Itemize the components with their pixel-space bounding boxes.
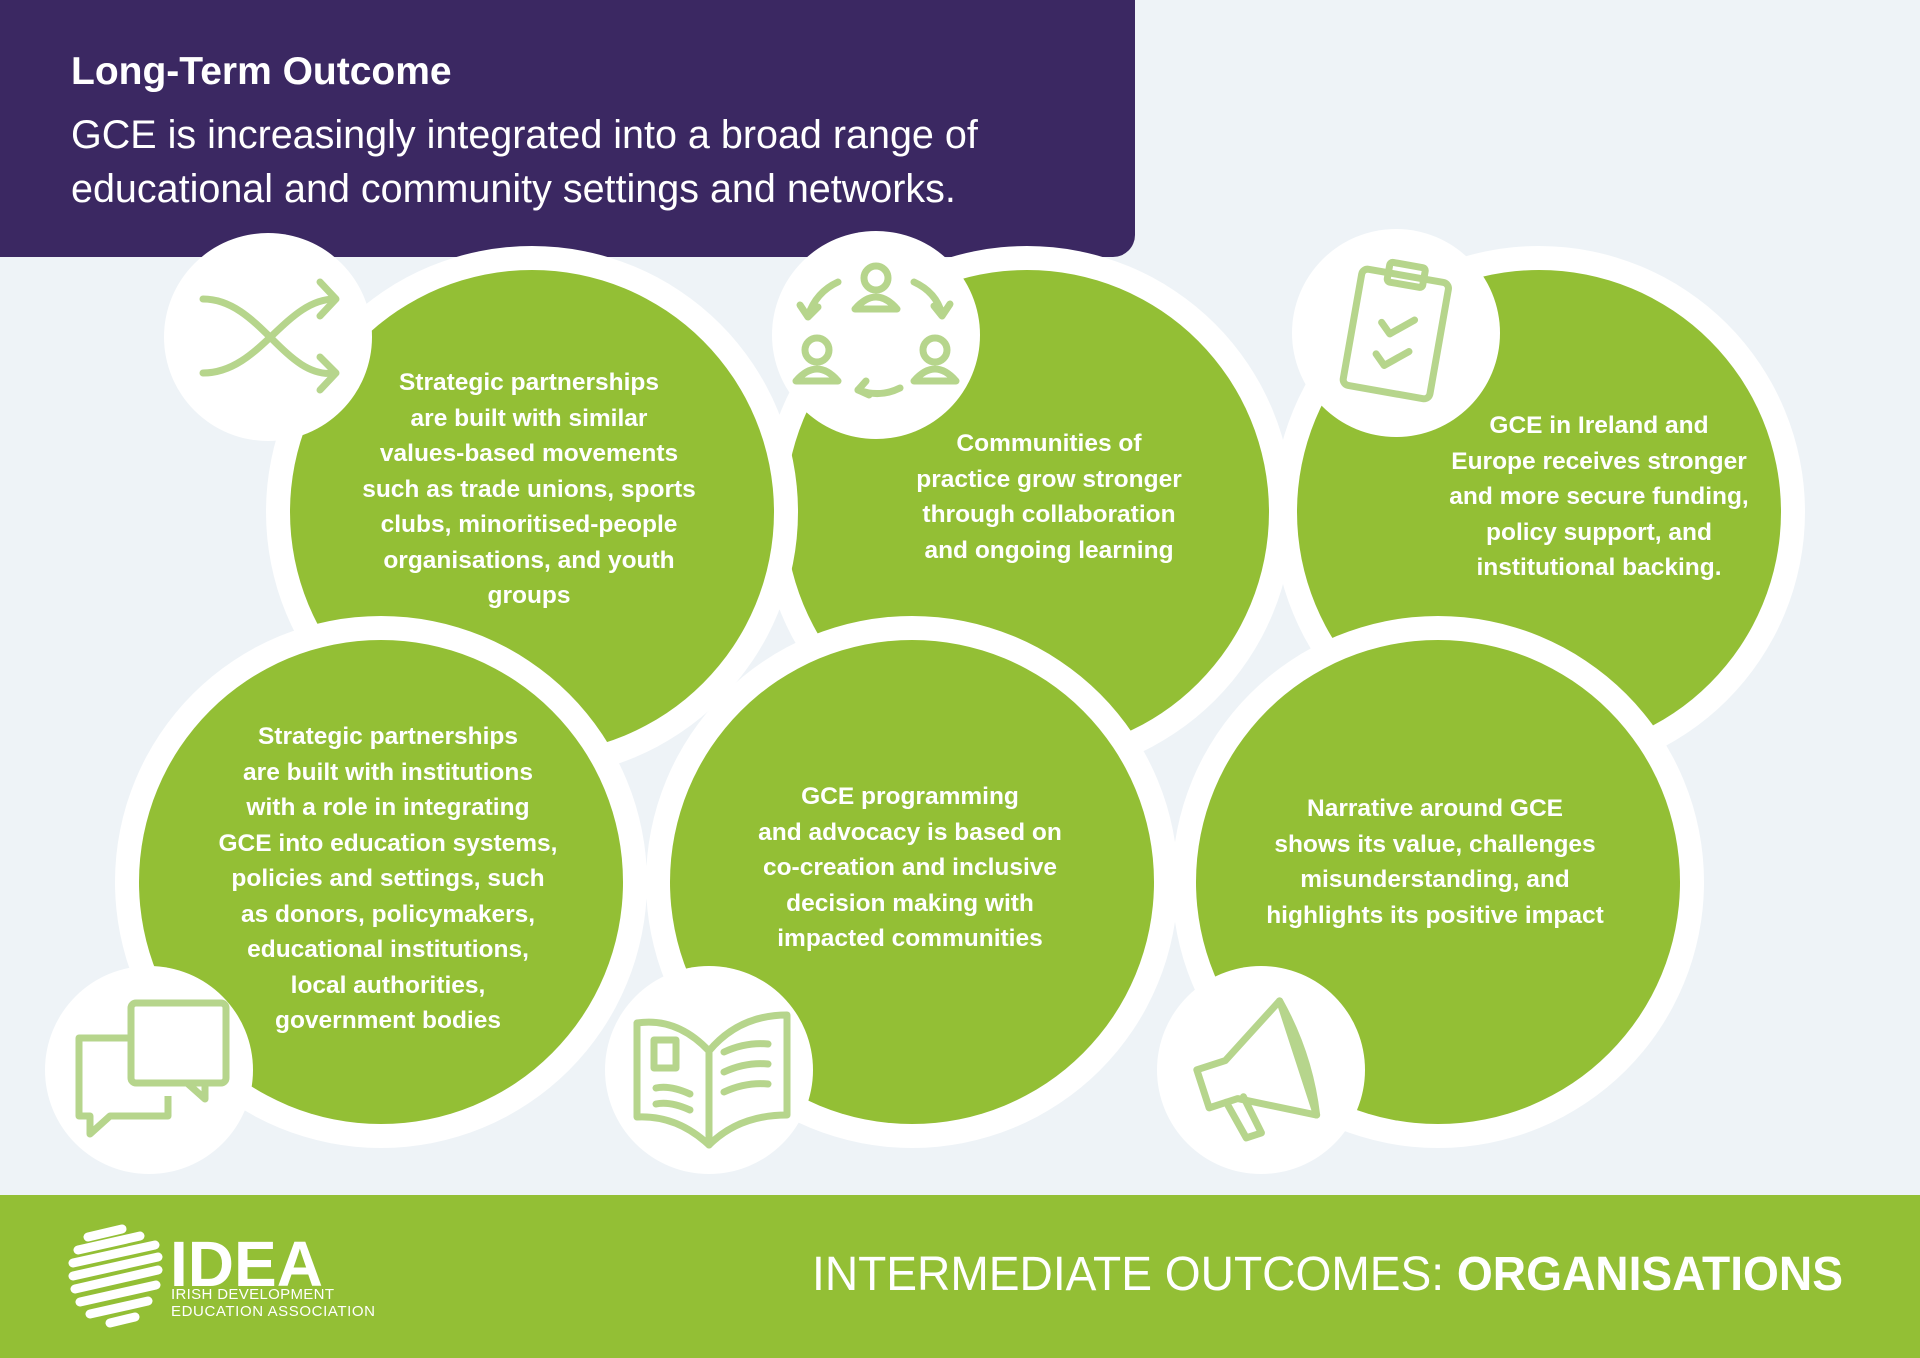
text: circle 1 bbox=[362, 369, 696, 609]
text: circle 1: clubs, minoritised-people bbox=[381, 511, 677, 538]
text: circle 5: co-creation and inclusive bbox=[763, 854, 1057, 881]
text: circle 5 bbox=[758, 783, 1062, 952]
text: circle 6: shows its value, challenges bbox=[1274, 830, 1596, 858]
text: circle 3: institutional backing. bbox=[1476, 554, 1722, 581]
text: circle 3 bbox=[1449, 412, 1749, 581]
icon: megaphone bbox=[1184, 999, 1322, 1146]
text: circle 2: and ongoing learning bbox=[924, 536, 1174, 564]
text: circle 5: GCE programming bbox=[801, 783, 1019, 810]
text: circle 4: with a role in integrating bbox=[246, 794, 530, 821]
text: circle 5: impacted communities bbox=[777, 925, 1043, 952]
text: circle 1: are built with similar bbox=[411, 404, 647, 432]
text: circle 2 bbox=[916, 430, 1182, 564]
text: circle 6: highlights its positive impact bbox=[1266, 902, 1604, 928]
footer title: INTERMEDIATE OUTCOMES: ORGANISATIONS bbox=[812, 1248, 1843, 1301]
text: circle 1: organisations, and youth bbox=[383, 546, 675, 574]
icon: open book bbox=[637, 1015, 787, 1145]
logo: IDEA: EDUCATION ASSOCIATION bbox=[171, 1303, 375, 1320]
text: circle 4: are built with institutions bbox=[243, 758, 533, 786]
text: circle 1: Strategic partnerships bbox=[399, 369, 659, 396]
text: circle 4: as donors, policymakers, bbox=[241, 900, 535, 928]
logo: IDEA: IDEA bbox=[170, 1228, 323, 1300]
text: circle 3: GCE in Ireland and bbox=[1489, 412, 1709, 439]
subtitle: educational and community settings and networks. bbox=[71, 167, 956, 211]
text: circle 3: policy support, and bbox=[1486, 518, 1712, 546]
text: circle 3: and more secure funding, bbox=[1449, 483, 1749, 510]
subtitle: GCE is increasingly integrated into a broad range of bbox=[71, 113, 978, 157]
text: circle 4: local authorities, bbox=[291, 972, 485, 998]
logo: IDEA bbox=[68, 1224, 375, 1328]
text: circle 6: misunderstanding, and bbox=[1300, 866, 1570, 893]
icon: chat bubbles bbox=[79, 1003, 226, 1134]
text: circle 2: Communities of bbox=[956, 430, 1142, 457]
footer bar bbox=[0, 1195, 1920, 1358]
title: Long-Term Outcome bbox=[71, 50, 452, 93]
icon: clipboard bbox=[1342, 257, 1451, 400]
text: circle 6 bbox=[1266, 795, 1604, 928]
text: circle 4: government bodies bbox=[275, 1007, 501, 1034]
icon: community cycle bbox=[796, 266, 956, 395]
text: circle 5: decision making with bbox=[786, 890, 1034, 916]
text: circle 4: Strategic partnerships bbox=[258, 723, 518, 750]
icon: shuffle arrows bbox=[203, 282, 336, 390]
text: circle 3: Europe receives stronger bbox=[1451, 448, 1747, 474]
text: circle 4 bbox=[218, 723, 558, 1034]
subtitle bbox=[71, 113, 978, 211]
text: circle 5: and advocacy is based on bbox=[758, 818, 1062, 846]
text: circle 2: through collaboration bbox=[922, 501, 1176, 528]
text: circle 2: practice grow stronger bbox=[916, 466, 1182, 492]
text: circle 4: policies and settings, such bbox=[231, 865, 545, 892]
logo: IDEA: IRISH DEVELOPMENT bbox=[171, 1286, 334, 1303]
text: circle 1: values-based movements bbox=[380, 440, 678, 467]
text: circle 6: Narrative around GCE bbox=[1307, 795, 1563, 822]
text: circle 4: educational institutions, bbox=[247, 936, 529, 963]
text: circle 1: such as trade unions, sports bbox=[362, 476, 696, 502]
text: circle 4: GCE into education systems, bbox=[218, 830, 558, 856]
header panel bbox=[0, 0, 1135, 257]
text: circle 1: groups bbox=[487, 582, 571, 609]
